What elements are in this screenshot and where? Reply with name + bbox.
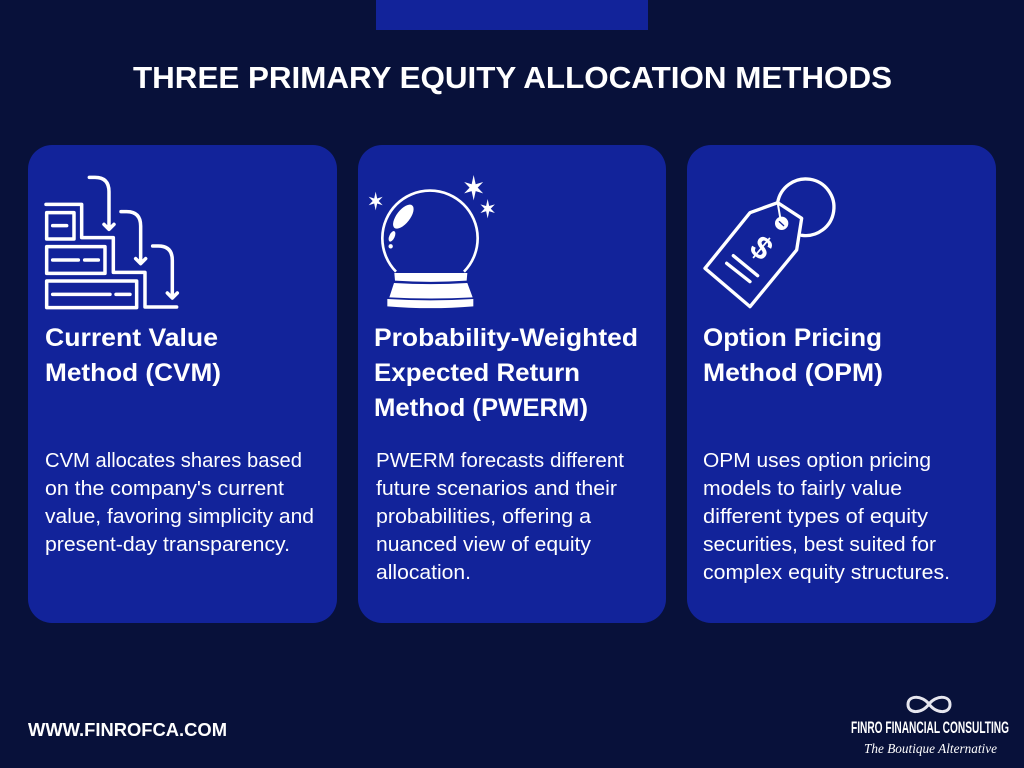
panel: current value method [28,145,337,623]
top accent bar [376,0,648,30]
text: current value description: present-day transparency. [45,533,290,556]
text: probability-weighted description: probabilities, offering a [376,505,592,528]
icon: stepped boxes with arrows [46,177,177,308]
text: probability-weighted description: PWERM forecasts different [376,449,624,472]
text: probability-weighted description [376,449,624,584]
text: probability-weighted description: nuanced view of equity [376,533,592,556]
heading: current value method [45,324,221,387]
text: option pricing description [703,449,950,584]
text: option pricing description: different types of equity [703,505,929,528]
icon: price tag [705,179,834,307]
icon: infinity [908,697,950,712]
text: current value description: CVM allocates shares based [45,449,302,472]
footer website: WWW.FINROFCA.COM [28,719,227,740]
heading: probability-weighted method: Method (PWERM) [374,394,588,422]
heading: option pricing method: Option Pricing [703,324,882,352]
text: current value description: on the company's current [45,477,284,500]
heading: probability-weighted method: Probability-Weighted [374,324,638,352]
heading: probability-weighted method [374,324,638,422]
heading: probability-weighted method: Expected Return [374,359,580,387]
text: probability-weighted description: allocation. [376,561,471,584]
tagline: The Boutique Alternative [864,741,997,756]
text: probability-weighted description: future scenarios and their [376,477,617,500]
heading: current value method: Current Value [45,324,218,352]
text: current value description: value, favoring simplicity and [45,505,314,528]
panel: probability-weighted method [358,145,666,623]
icon: price tag: $ [743,228,780,267]
heading: option pricing method [703,324,883,387]
text: option pricing description: securities, best suited for [703,533,936,556]
icon: crystal ball [369,175,495,308]
heading: current value method: Method (CVM) [45,359,221,387]
text: current value description [45,449,314,556]
footer logo [851,697,1009,756]
panel: option pricing method [687,145,996,623]
heading: option pricing method: Method (OPM) [703,359,883,387]
text: option pricing description: models to fairly value [703,477,902,500]
title: THREE PRIMARY EQUITY ALLOCATION METHODS [133,60,892,95]
text: option pricing description: complex equity structures. [703,561,950,584]
text: option pricing description: OPM uses option pricing [703,449,931,472]
